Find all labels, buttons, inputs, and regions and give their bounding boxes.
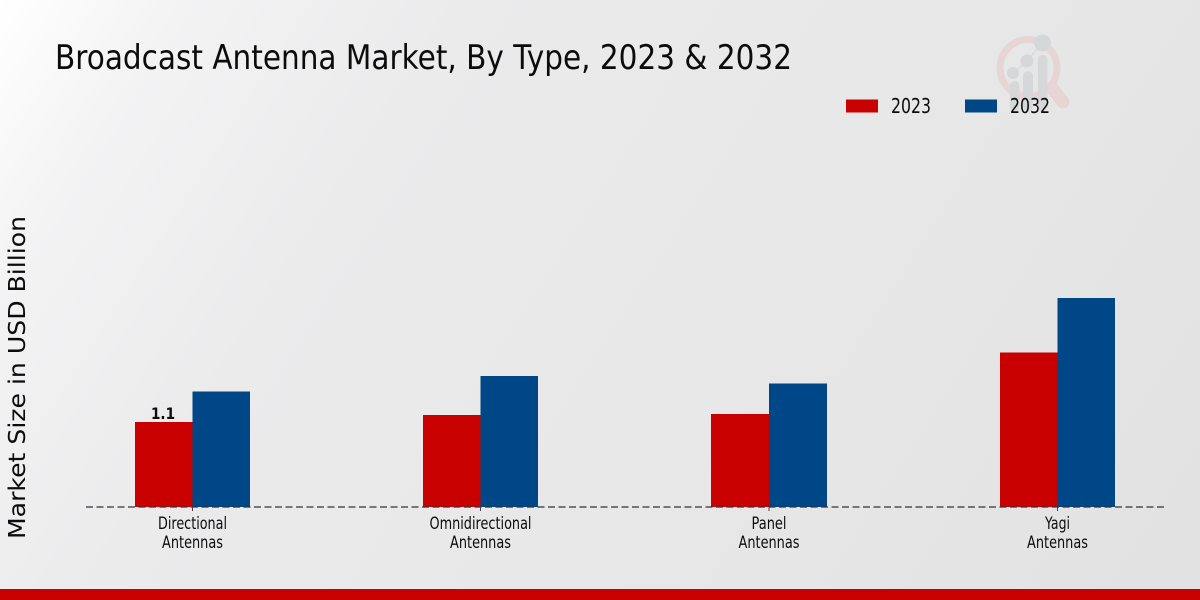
label: Directional Antennas: Antennas — [162, 533, 223, 552]
bar chart — [86, 298, 1164, 507]
icon: watermark logo — [1000, 34, 1063, 111]
label: Yagi Antennas: Yagi — [1044, 514, 1070, 533]
label: Yagi Antennas — [1027, 507, 1088, 552]
legend: 2023 — [846, 94, 931, 118]
x-axis baseline — [86, 506, 1164, 508]
group: Panel Antennas — [711, 384, 827, 507]
legend: 2023: 2023 — [891, 94, 931, 118]
label: Yagi Antennas: Antennas — [1027, 533, 1088, 552]
value label: 1.1 — [151, 404, 175, 423]
legend — [846, 94, 1050, 118]
label: Omnidirectional Antennas — [430, 507, 532, 552]
x-axis labels — [158, 507, 1088, 552]
label: Panel Antennas: Panel — [752, 514, 786, 533]
group: Yagi Antennas — [1000, 298, 1115, 507]
label: Directional Antennas — [158, 507, 227, 552]
y-axis label: Market Size in USD Billion — [3, 216, 31, 539]
label: Panel Antennas — [738, 507, 800, 552]
legend: 2032 — [965, 94, 1050, 118]
label: Panel Antennas: Antennas — [738, 533, 800, 552]
label: Directional Antennas: Directional — [158, 514, 227, 533]
legend: 2032: 2032 — [1010, 94, 1050, 118]
group: Directional Antennas — [135, 392, 250, 507]
label: Omnidirectional Antennas: Antennas — [450, 533, 511, 552]
label: Omnidirectional Antennas: Omnidirectional — [430, 514, 532, 533]
group: Omnidirectional Antennas — [423, 376, 538, 507]
title: Broadcast Antenna Market, By Type, 2023 & 2032 — [55, 38, 792, 77]
footer bar — [0, 589, 1200, 600]
